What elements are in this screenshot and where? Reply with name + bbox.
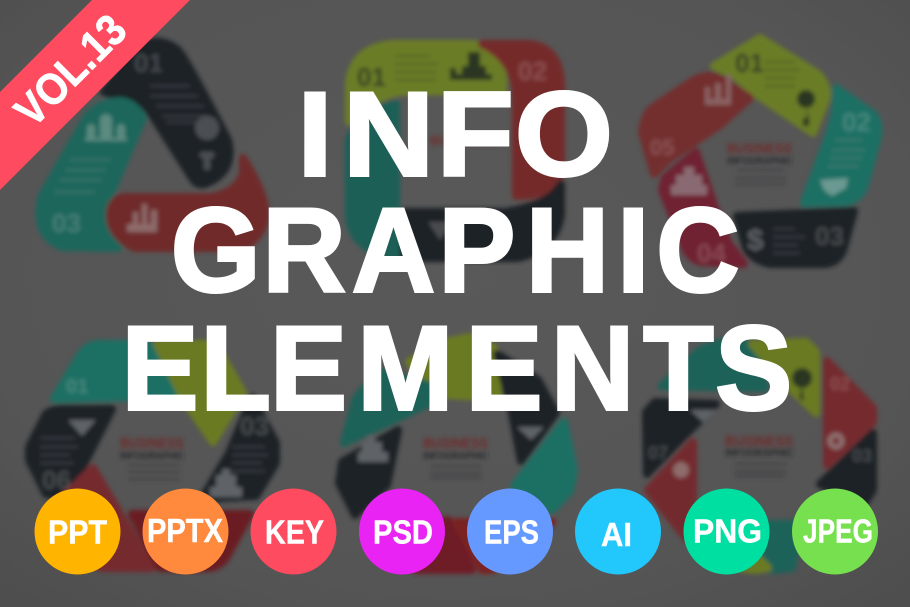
heading: BUSINESS <box>727 140 792 156</box>
badge: key <box>250 488 336 574</box>
title line: graphic: GRAPHIC <box>171 183 739 317</box>
body lines <box>734 464 786 476</box>
icon: handshake <box>820 178 848 196</box>
icon: ring <box>830 435 842 447</box>
segment dark right <box>202 398 276 499</box>
text lines <box>395 56 438 80</box>
segment olive bottom <box>742 552 768 570</box>
icon: bars <box>705 75 731 105</box>
segment 02 teal <box>804 88 878 203</box>
segment teal top <box>662 342 765 388</box>
icon: heart <box>68 420 96 436</box>
segment olive <box>409 337 498 398</box>
title line: elements: ELEMENTS <box>122 301 792 435</box>
text lines <box>40 438 78 463</box>
number 07: 07 <box>648 443 668 463</box>
icon: bulb <box>195 116 219 170</box>
icon: people <box>210 469 242 497</box>
badge: ppt: PPT <box>48 514 107 550</box>
segment red right <box>827 361 873 465</box>
badge: jpeg <box>792 488 878 574</box>
format badges <box>34 488 878 574</box>
subheading: INFOGRAPHIC <box>725 448 793 459</box>
body lines <box>128 465 180 479</box>
segment 05 red <box>642 76 750 174</box>
number 02: 02 <box>518 56 547 86</box>
segment 02 red <box>110 158 266 248</box>
number 05: 05 <box>650 135 674 160</box>
icon: bulb <box>797 90 815 126</box>
icon: heart <box>428 222 452 240</box>
number 01: 01 <box>66 376 88 398</box>
icon: people <box>358 436 388 462</box>
segment dark right <box>497 354 556 461</box>
segment dark left <box>339 430 398 515</box>
number 02: 02 <box>830 374 850 394</box>
segment 02 red <box>482 44 561 196</box>
heading: BUSINESS <box>423 435 488 452</box>
number 02: 02 <box>842 107 871 137</box>
heading: BUSINESS <box>430 133 497 148</box>
blurred infographic: rounded square <box>349 44 561 258</box>
blurred infographic: heptagon <box>339 337 574 570</box>
badge: psd <box>359 488 445 574</box>
segment teal right <box>514 422 574 510</box>
body lines <box>735 170 786 184</box>
badge: eps <box>467 488 553 574</box>
ribbon: vol. 13 <box>0 0 190 190</box>
segment olive <box>752 342 816 413</box>
icon: people <box>450 52 492 80</box>
icon: people <box>671 167 707 195</box>
segment red left <box>54 468 152 568</box>
badge: psd: PSD <box>373 514 433 550</box>
segment 03 teal <box>40 101 143 248</box>
number 03: 03 <box>815 221 844 251</box>
subheading: INFOGRAPHIC <box>423 451 488 462</box>
segment 01 olive <box>349 44 503 122</box>
segment dark right <box>820 433 873 504</box>
segment red right <box>132 514 250 568</box>
segment teal top <box>344 372 432 443</box>
segment 04 crimson <box>662 152 744 264</box>
segment 01 olive <box>714 38 827 133</box>
segment red right <box>456 522 552 570</box>
badge: key: KEY <box>265 514 324 550</box>
segment dark left <box>29 409 112 496</box>
badge: png <box>684 488 770 574</box>
badge: pptx <box>142 488 228 574</box>
segment teal <box>54 344 174 399</box>
blurred infographic: pentagon <box>642 38 878 268</box>
icon: heart <box>517 427 544 440</box>
badge: pptx: PPTX <box>147 512 223 549</box>
number 01: 01 <box>134 48 163 78</box>
segment dark left <box>646 402 716 474</box>
blurred infographic: hexagon <box>29 344 276 568</box>
blurred infographic: triangle <box>40 42 266 248</box>
heading: BUSINESS <box>725 433 793 450</box>
number 03: 03 <box>240 411 269 441</box>
number 03: 03 <box>852 446 872 466</box>
segment 03 dark <box>737 211 854 264</box>
badge: eps: EPS <box>484 514 539 550</box>
icon: people <box>85 114 127 141</box>
badge: ppt <box>34 488 120 574</box>
icon: bulb <box>792 368 812 400</box>
text lines <box>150 86 212 122</box>
badge: ai <box>575 488 661 574</box>
badge: png: PNG <box>693 512 762 550</box>
badge: jpeg: JPEG <box>803 512 873 550</box>
number 04: 04 <box>697 238 726 268</box>
segment 01 dark <box>104 42 230 184</box>
number 06: 06 <box>42 465 71 495</box>
icon: heart <box>690 410 716 422</box>
number 03: 03 <box>52 208 81 238</box>
badge: ai: AI <box>601 516 632 553</box>
heading: BUSINESS <box>120 435 184 452</box>
title line: info: INFO <box>298 68 613 202</box>
segment red left <box>396 520 472 570</box>
segment 04 dark <box>404 184 561 258</box>
blurred infographic: octagon <box>646 342 873 570</box>
title <box>122 68 792 435</box>
segment red left <box>648 442 693 538</box>
segment olive <box>157 344 243 442</box>
text lines teal <box>54 160 110 192</box>
segment teal bottom <box>745 524 800 570</box>
icon: bars <box>127 204 157 232</box>
segment 03 teal <box>349 104 396 258</box>
subheading: INFOGRAPHIC <box>120 451 184 462</box>
icon: dollar: $ <box>747 224 764 257</box>
icon: gear <box>673 462 689 478</box>
number 01: 01 <box>357 62 386 92</box>
subheading: INFOGRAPHIC <box>727 156 792 167</box>
body lines <box>430 466 482 478</box>
number 01: 01 <box>735 48 764 78</box>
text lines <box>765 62 800 86</box>
